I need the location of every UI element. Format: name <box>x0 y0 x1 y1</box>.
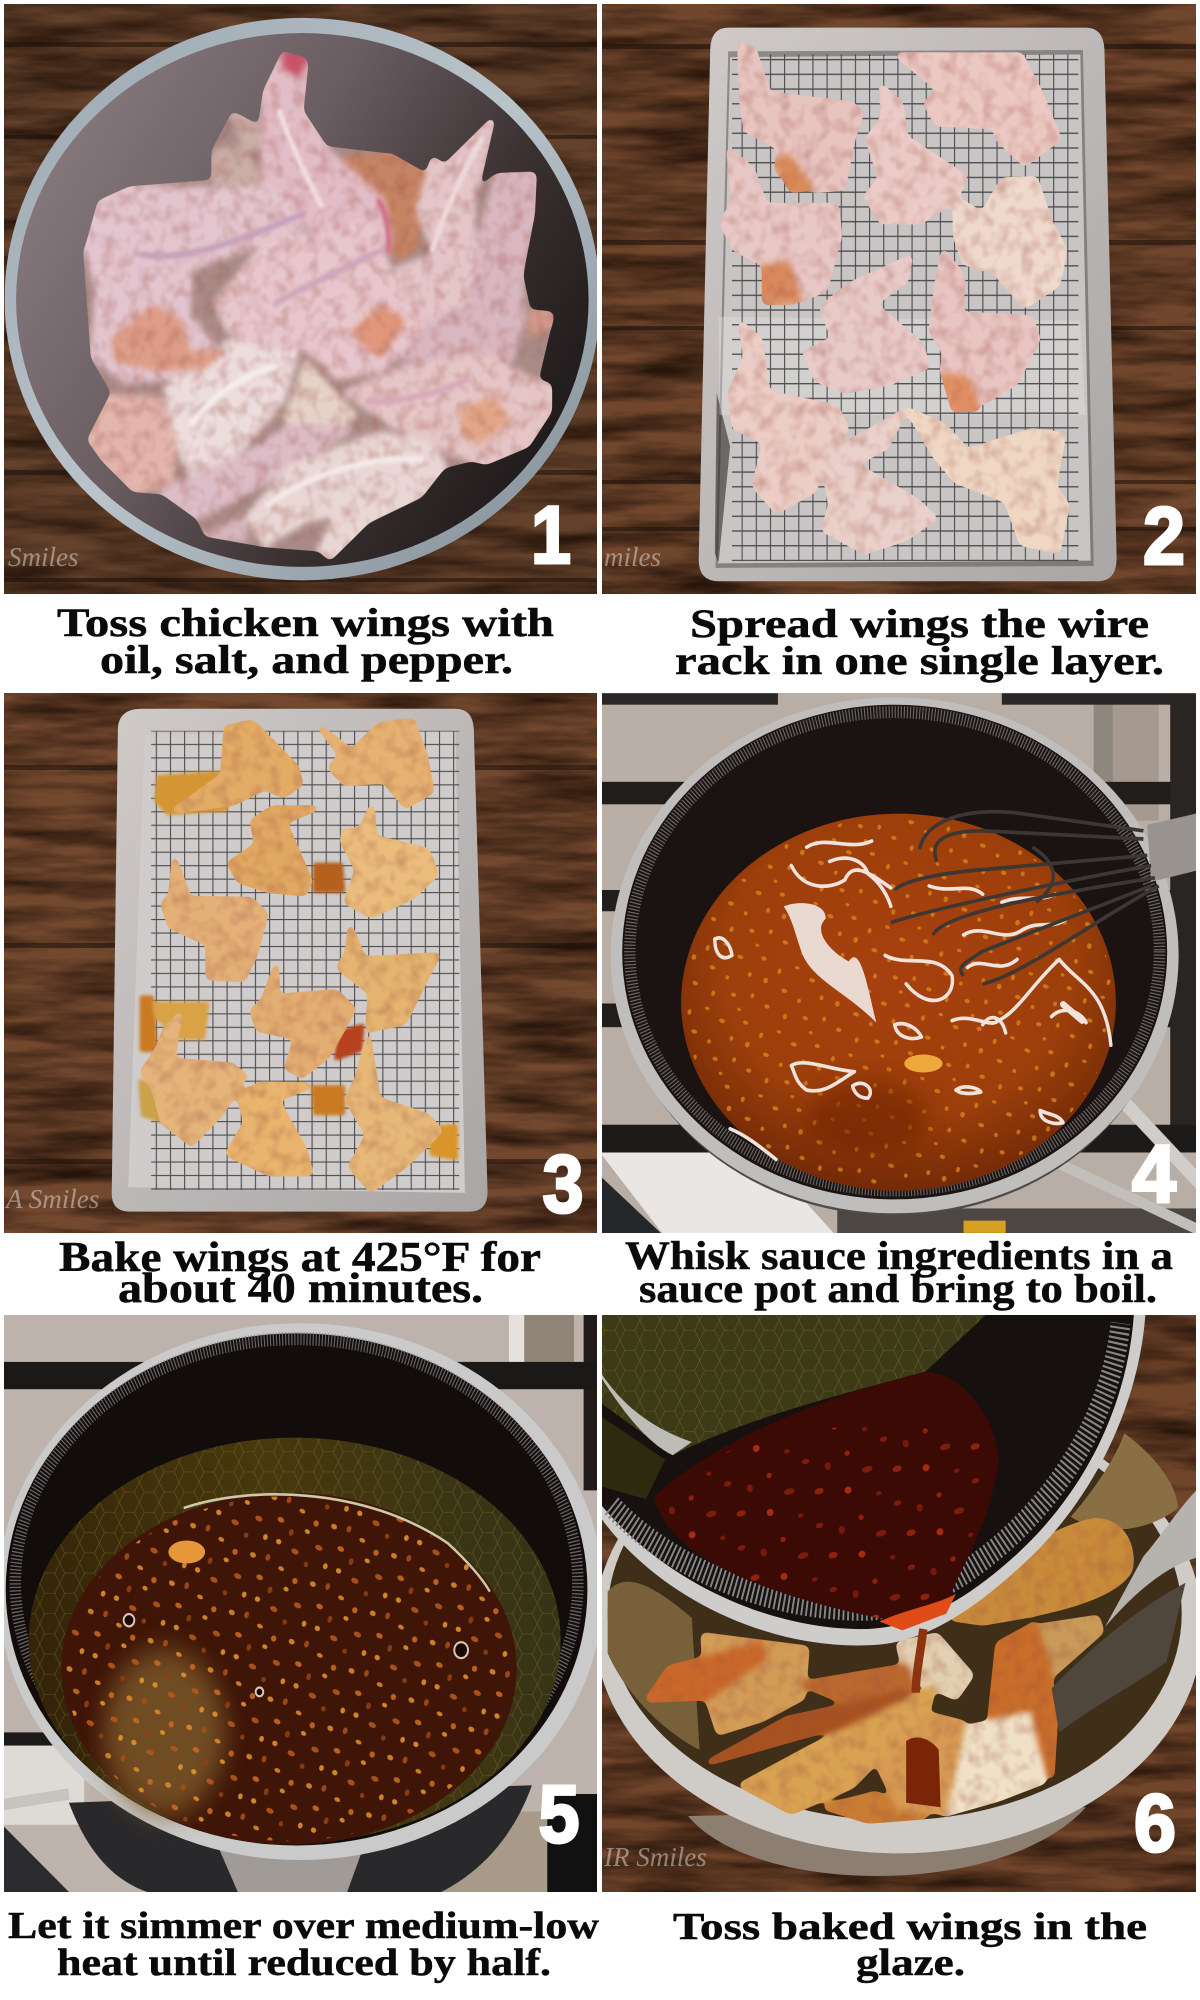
panel: step 1 raw wings in bowl <box>4 4 600 594</box>
caption: step 4: sauce pot and bring to boil. <box>639 1266 1157 1311</box>
caption: step 2 <box>675 601 1164 683</box>
skin folds <box>142 112 482 504</box>
watermark: step 1: Smiles <box>8 542 78 572</box>
pot handle <box>1063 1106 1200 1231</box>
panel: step 2 raw wings on wire rack <box>602 4 1196 594</box>
caption: step 3 <box>59 1235 541 1312</box>
garlic highlight <box>904 1055 943 1072</box>
glaze pool on wings <box>906 1738 941 1807</box>
step number 5: 5 <box>538 1769 580 1860</box>
step number 1: 1 <box>531 490 571 581</box>
saucepan <box>0 1323 603 1860</box>
caption: step 2: rack in one single layer. <box>675 638 1164 683</box>
watermark: step 6: IR Smiles <box>603 1842 707 1872</box>
step number 3: 3 <box>542 1139 584 1230</box>
grease drippings <box>141 774 455 1157</box>
watermark: step 2: miles <box>604 542 661 572</box>
caption: step 5: Let it simmer over medium-low <box>8 1905 600 1947</box>
pot base highlight <box>220 1850 361 1892</box>
caption: step 3: Bake wings at 425°F for <box>59 1235 541 1281</box>
caption: step 5: heat until reduced by half. <box>57 1942 551 1984</box>
caption: step 3: about 40 minutes. <box>118 1266 483 1312</box>
sauce <box>681 814 1116 1191</box>
whisk <box>891 812 1200 984</box>
glaze in pan <box>654 1372 999 1620</box>
caption: step 5 <box>8 1905 600 1984</box>
bowl <box>5 18 600 580</box>
pot body <box>69 1785 532 1900</box>
step number 2: 2 <box>1143 491 1185 582</box>
reflections on sauce <box>715 841 1111 1159</box>
caption: step 4 <box>625 1233 1173 1311</box>
panel: step 5 simmering sauce <box>0 1310 603 1900</box>
panel: step 6 pouring glaze on wings <box>594 1314 1200 1892</box>
bubbles <box>124 1614 468 1696</box>
caption: step 6: glaze. <box>856 1942 965 1984</box>
baking tray <box>112 709 488 1212</box>
step number 6: 6 <box>1134 1778 1176 1869</box>
tong handle <box>1105 1486 1200 1627</box>
steel bowl <box>594 1400 1200 1876</box>
panel: step 4 whisking sauce in pot <box>600 690 1200 1237</box>
saucepan <box>611 697 1179 1216</box>
caption: step 4: Whisk sauce ingredients in a <box>625 1233 1173 1278</box>
glaze at pan lip <box>879 1594 956 1630</box>
golden baked wings <box>142 721 440 1190</box>
raw wings on rack <box>722 45 1067 551</box>
watermark: step 3: A Smiles <box>4 1184 99 1214</box>
stove top and grates <box>600 690 1200 1237</box>
caption: step 6: Toss baked wings in the <box>673 1906 1147 1948</box>
caption: step 1: Toss chicken wings with <box>57 600 554 645</box>
pouring saucepan <box>600 1314 1145 1645</box>
stove top <box>0 1310 601 1900</box>
step number 4: 4 <box>1132 1129 1176 1220</box>
caption: step 1 <box>57 600 554 682</box>
chicken wings pile <box>86 54 551 557</box>
caption: step 6 <box>673 1906 1147 1984</box>
tongs <box>1052 1583 1186 1732</box>
oil ring <box>29 1438 561 1842</box>
caption: step 1: oil, salt, and pepper. <box>100 637 513 682</box>
pot handle <box>0 1794 69 1805</box>
reduced sauce <box>61 1493 517 1845</box>
baked wings in bowl <box>648 1521 1131 1820</box>
panel: step 3 baked wings on rack <box>4 693 597 1233</box>
glaze drip <box>916 1629 923 1693</box>
baking tray <box>699 28 1117 581</box>
caption: step 2: Spread wings the wire <box>690 601 1149 646</box>
